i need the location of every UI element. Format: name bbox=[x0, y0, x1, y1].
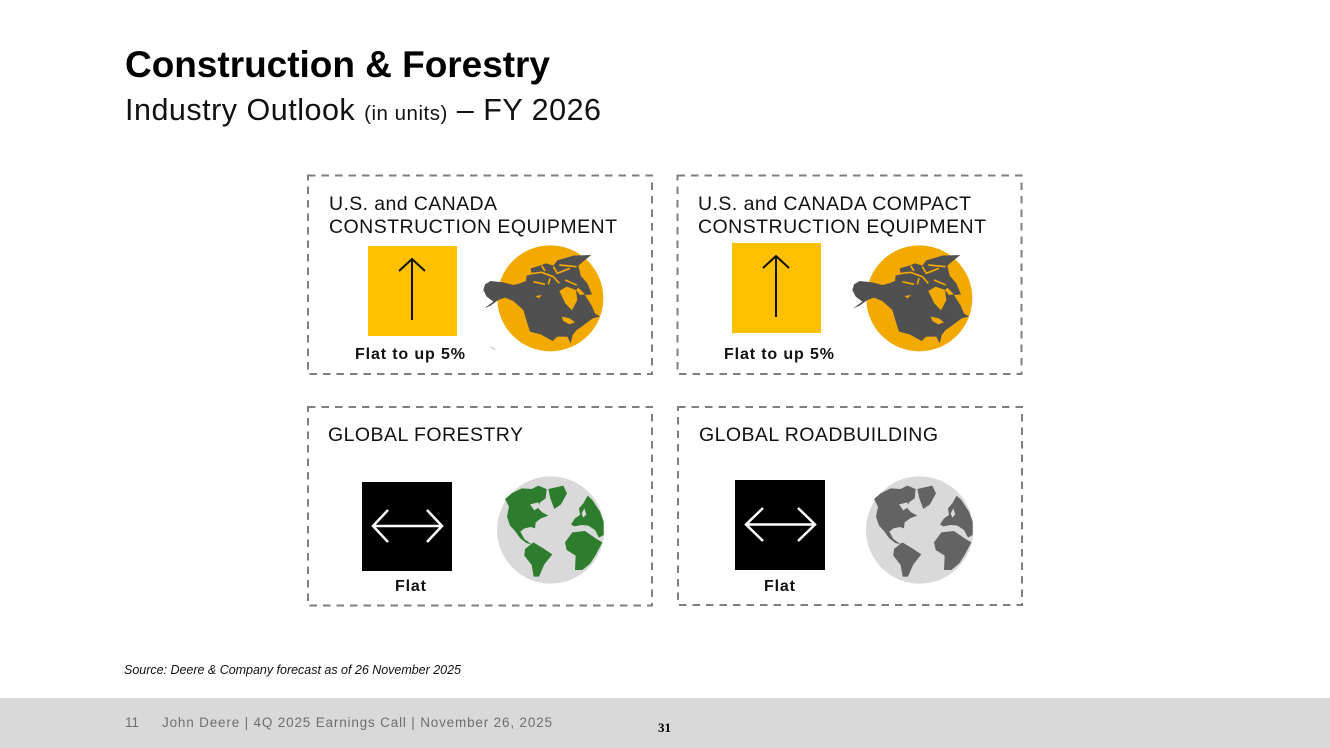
panel: US and Canada compact construction equipment bbox=[678, 176, 1022, 374]
icon: green globe bbox=[497, 476, 604, 584]
panel: global roadbuilding bbox=[678, 407, 1022, 605]
small mark bbox=[491, 347, 495, 350]
label: Flat bbox=[764, 578, 796, 595]
Hudson Bay and channels bbox=[535, 287, 585, 324]
heading: U.S. and CANADA bbox=[329, 193, 497, 215]
heading: GLOBAL FORESTRY bbox=[328, 424, 523, 446]
title: Construction & Forestry bbox=[125, 44, 550, 85]
heading: U.S. and CANADA COMPACT bbox=[698, 193, 971, 215]
Hudson Bay and channels bbox=[904, 287, 954, 324]
page number centre: 31 bbox=[658, 720, 671, 735]
icon: up arrow bbox=[732, 243, 821, 333]
heading: GLOBAL ROADBUILDING bbox=[699, 424, 938, 446]
panel: global forestry bbox=[308, 407, 652, 606]
icon: flat arrow bbox=[735, 480, 825, 570]
icon: North America map bbox=[483, 245, 603, 351]
label: Flat bbox=[395, 578, 427, 595]
heading: CONSTRUCTION EQUIPMENT bbox=[329, 216, 617, 238]
label: Flat to up 5% bbox=[355, 346, 465, 363]
icon: up arrow bbox=[368, 246, 457, 336]
subtitle: Industry Outlook (in units) – FY 2026 bbox=[125, 93, 601, 127]
heading: CONSTRUCTION EQUIPMENT bbox=[698, 216, 986, 238]
label: Flat to up 5% bbox=[724, 346, 834, 363]
icon: flat arrow bbox=[362, 482, 452, 571]
panel: US and Canada construction equipment bbox=[308, 176, 652, 374]
footer bar bbox=[0, 698, 1330, 748]
footer text: John Deere | 4Q 2025 Earnings Call | November 26, 2025 bbox=[162, 715, 552, 730]
source note: Source: Deere & Company forecast as of 26 November 2025 bbox=[124, 663, 461, 677]
page number left: 11 bbox=[125, 715, 139, 730]
icon: grey globe bbox=[866, 476, 973, 584]
icon: North America map bbox=[852, 245, 972, 351]
